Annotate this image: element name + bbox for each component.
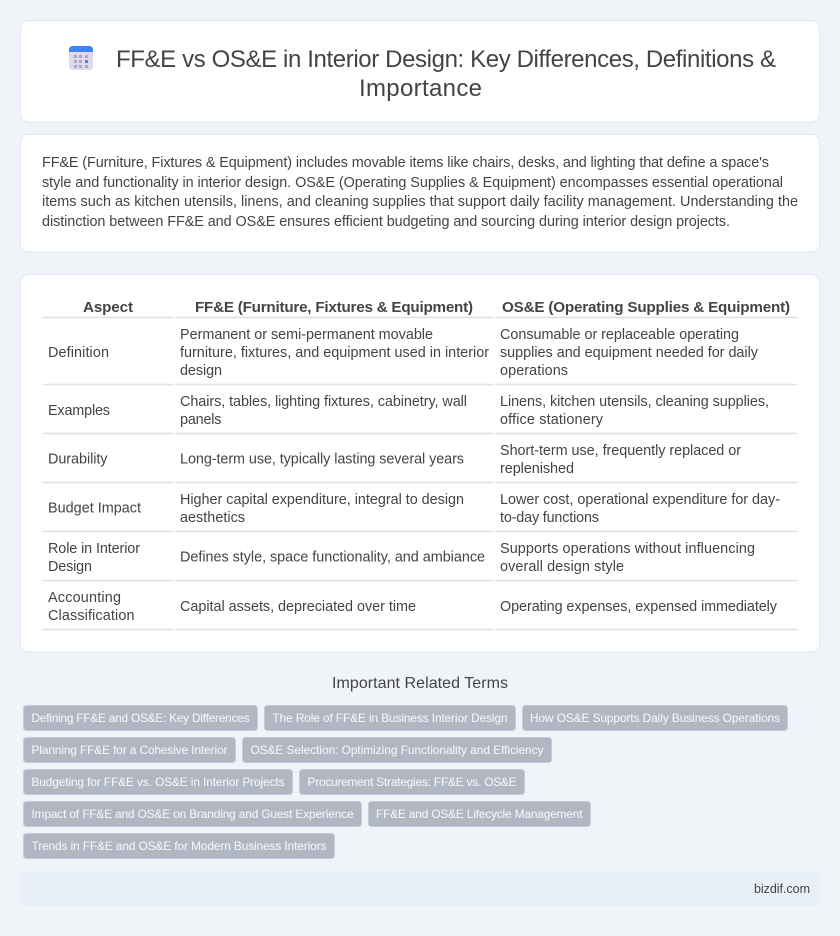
tag: How OS&E Supports Daily Business Operations [530, 711, 780, 725]
tag [300, 770, 524, 794]
table row: role in interior design: overall design style [500, 559, 624, 575]
tag [24, 706, 258, 730]
table header row [43, 299, 797, 318]
table row: durability: Durability [48, 452, 108, 468]
table row: definition: design [180, 363, 222, 379]
title text: FF&E vs OS&E in Interior Design: Key Differences, Definitions & [116, 46, 776, 73]
table header row: OS&E (Operating Supplies & Equipment) [502, 299, 790, 316]
table header row: Aspect [83, 299, 133, 316]
table row: durability: Short-term use, frequently replaced or [500, 443, 741, 459]
footer [20, 872, 820, 906]
tag: Procurement Strategies: FF&E vs. OS&E [308, 775, 517, 789]
tag [264, 706, 516, 730]
panel: intro paragraph [20, 134, 820, 252]
tag: Trends in FF&E and OS&E for Modern Business Interiors [32, 839, 327, 853]
table row: accounting classification: Operating expenses, expensed immediately [500, 599, 778, 615]
table row: examples: Chairs, tables, lighting fixtures, cabinetry, wall [180, 394, 467, 410]
heading: important related terms: Important Related Terms [332, 675, 508, 692]
table row: role in interior design: Supports operations without influencing [500, 541, 755, 557]
table row: examples: Linens, kitchen utensils, cleaning supplies, [500, 394, 769, 410]
tag: Planning FF&E for a Cohesive Interior [32, 743, 228, 757]
icon: calendar [69, 46, 93, 70]
table row: examples: panels [180, 412, 222, 428]
table row: definition: Permanent or semi-permanent movable [180, 327, 433, 343]
table header row: FF&E (Furniture, Fixtures & Equipment) [195, 299, 473, 316]
table row: budget impact: Budget Impact [48, 500, 141, 516]
table row: examples: Examples [48, 403, 110, 419]
table row: budget impact: to-day functions [500, 510, 599, 526]
tag: The Role of FF&E in Business Interior Design [272, 711, 508, 725]
tag [24, 834, 334, 858]
table row: accounting classification [43, 590, 797, 630]
table row: durability [43, 443, 797, 482]
table row: definition: furniture, fixtures, and equipment used in interior [180, 345, 489, 361]
panel: title header [20, 20, 820, 122]
table row: definition: supplies and equipment needed for daily [500, 345, 759, 361]
table row: definition: operations [500, 363, 568, 379]
tag: Impact of FF&E and OS&E on Branding and Guest Experience [32, 807, 354, 821]
panel: comparison table [20, 274, 820, 652]
tag [24, 802, 362, 826]
title text [116, 46, 776, 102]
table row: accounting classification: Classification [48, 608, 134, 624]
table row: definition [43, 327, 797, 384]
table row: budget impact: Higher capital expenditure, integral to design [180, 492, 464, 508]
tag: Budgeting for FF&E vs. OS&E in Interior Projects [32, 775, 285, 789]
table row: examples: office stationery [500, 412, 604, 428]
tag: OS&E Selection: Optimizing Functionality and Efficiency [250, 743, 544, 757]
table row: budget impact: aesthetics [180, 510, 245, 526]
table row: durability: Long-term use, typically lasting several years [180, 452, 464, 468]
tag [368, 802, 590, 826]
paragraph text: distinction between FF&E and OS&E ensures efficient budgeting and sourcing during interior design projects. [42, 214, 730, 230]
tag [24, 738, 236, 762]
footer: bizdif.com [754, 882, 810, 896]
title text: Importance [359, 75, 482, 102]
table row: budget impact [43, 492, 797, 532]
paragraph text [42, 155, 798, 230]
table row: accounting classification: Accounting [48, 590, 121, 606]
tag [522, 706, 788, 730]
table row: role in interior design [43, 541, 797, 580]
panel: related term tags [24, 706, 788, 858]
table row: budget impact: Lower cost, operational expenditure for day- [500, 492, 780, 508]
tag: FF&E and OS&E Lifecycle Management [376, 807, 583, 821]
table row: role in interior design: Defines style, space functionality, and ambiance [180, 550, 485, 566]
table row: durability: replenished [500, 461, 574, 477]
tag [242, 738, 552, 762]
tag [24, 770, 292, 794]
table row: examples [43, 394, 797, 434]
table row: definition: Consumable or replaceable operating [500, 327, 739, 343]
tag: Defining FF&E and OS&E: Key Differences [32, 711, 250, 725]
paragraph text: style and functionality in interior design. OS&E (Operating Supplies & Equipment) encompasses essential operational [42, 175, 783, 191]
table row: role in interior design: Design [48, 559, 92, 575]
table row: accounting classification: Capital assets, depreciated over time [180, 599, 416, 615]
table row: definition: Definition [48, 345, 109, 361]
paragraph text: items such as kitchen utensils, linens, and cleaning supplies that support daily facility management. Understanding the [42, 194, 798, 210]
table row: role in interior design: Role in Interior [48, 541, 140, 557]
paragraph text: FF&E (Furniture, Fixtures & Equipment) includes movable items like chairs, desks, and lighting that define a space's [42, 155, 769, 171]
